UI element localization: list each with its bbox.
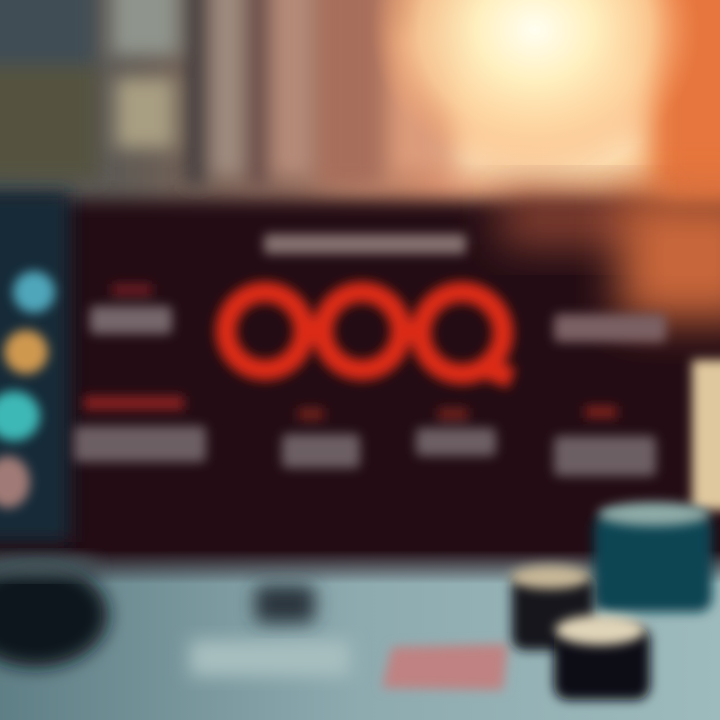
icon: blue dot: [13, 271, 55, 313]
text block: lower center right: [416, 408, 496, 456]
text block: upper right: [554, 314, 666, 342]
right cream object: [692, 360, 720, 510]
icon: left dark cup: [0, 556, 108, 667]
heading: blurred title: [264, 234, 466, 254]
icon: rose dot: [0, 456, 30, 508]
text block: upper left: [90, 284, 172, 334]
chart: three red rings: [226, 292, 512, 378]
panel: left sidebar: [0, 192, 70, 542]
icon: teal dot: [0, 391, 40, 441]
text block: lower center left: [282, 408, 360, 468]
icon: teal cup: [594, 502, 712, 612]
text block: lower right: [554, 406, 656, 476]
glow on the upper right of the monitor: [500, 195, 720, 320]
desk surface: [0, 550, 720, 720]
icon: front coffee cup: [554, 615, 650, 700]
background: window and wall: [0, 0, 720, 200]
icon: amber dot: [4, 330, 48, 374]
text block: lower left: [74, 396, 206, 462]
pink paper: [382, 644, 508, 690]
monitor stand: [255, 585, 315, 623]
icon: back coffee cup: [510, 565, 594, 650]
